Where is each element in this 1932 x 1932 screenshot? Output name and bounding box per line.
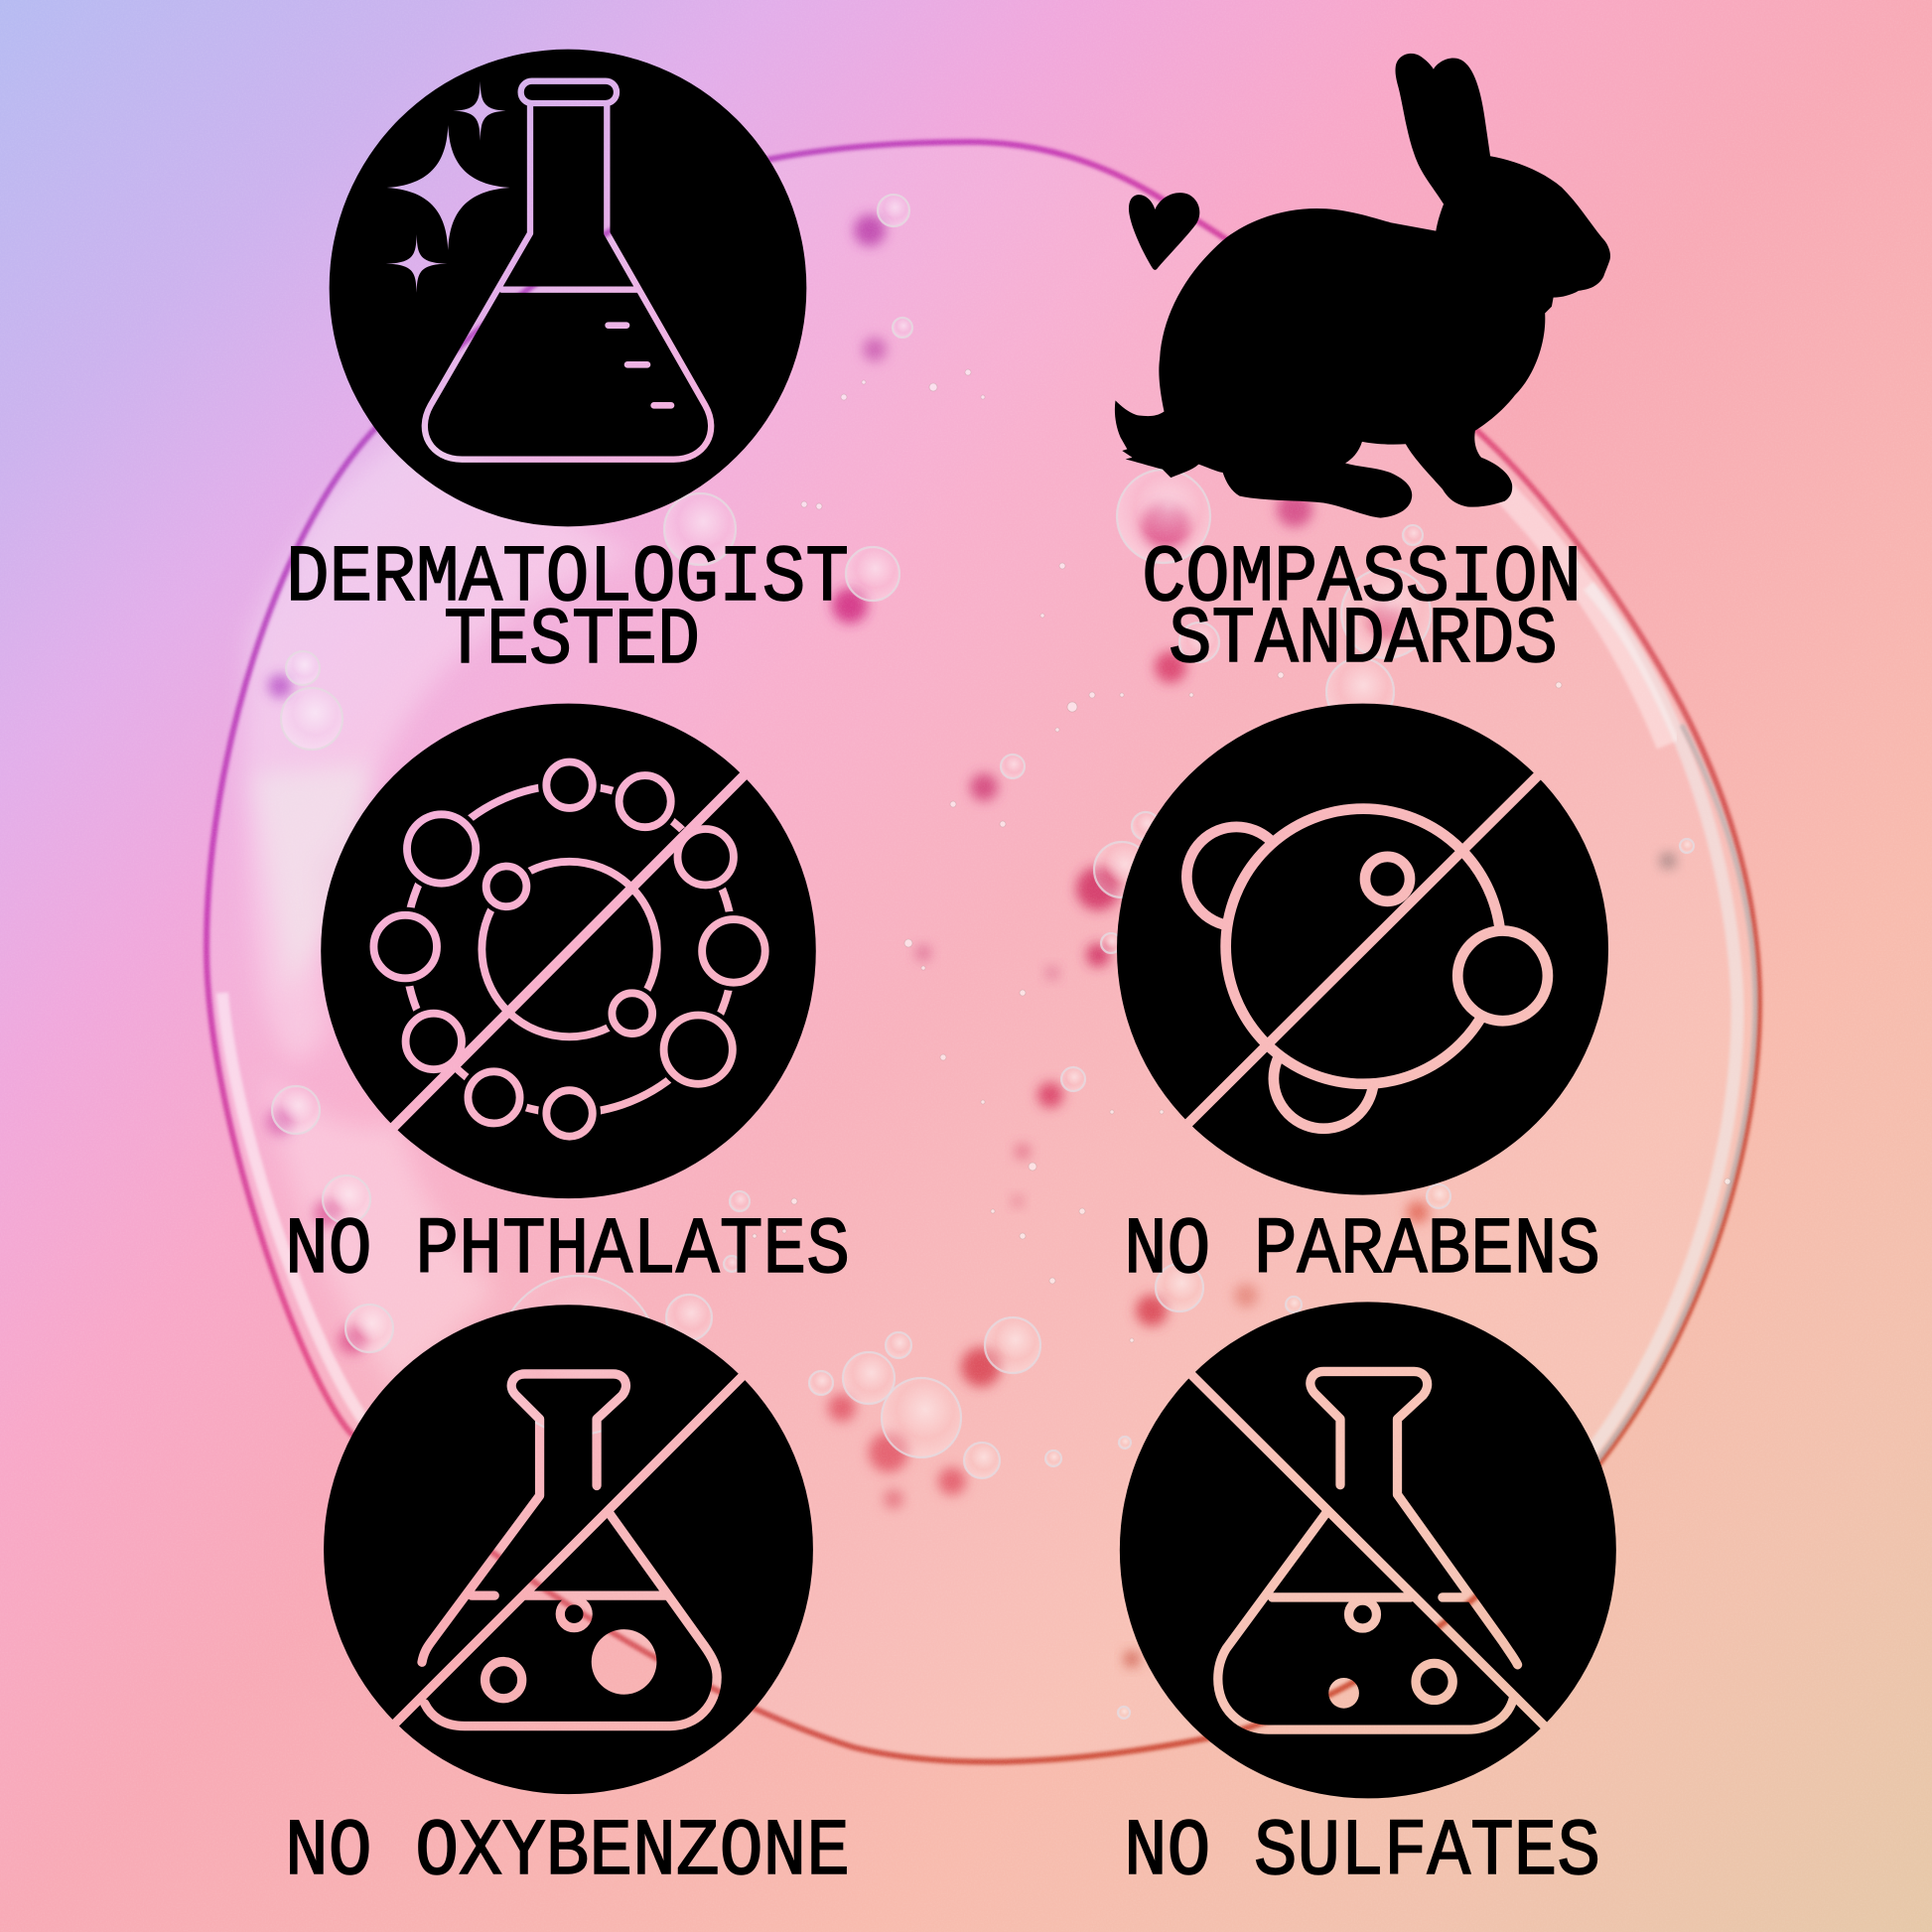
gel blob	[207, 142, 1759, 1762]
label: compassion standards: COMPASSION	[1142, 534, 1582, 624]
icon: dermatologist tested flask	[320, 40, 816, 536]
bubbles and droplets	[266, 195, 1730, 1759]
label: compassion standards	[1142, 534, 1582, 686]
icon: no sulfates	[1120, 1302, 1616, 1799]
icon: no phthalates	[321, 703, 816, 1199]
icon: no parabens	[1117, 703, 1608, 1195]
label: compassion standards: STANDARDS	[1169, 596, 1558, 686]
label: no phthalates: NO PHTHALATES	[285, 1206, 850, 1297]
icon: rabbit with heart	[1115, 54, 1610, 518]
label: dermatologist tested	[286, 534, 849, 687]
icon: no oxybenzone	[324, 1305, 813, 1795]
label: dermatologist tested: DERMATOLOGIST	[286, 534, 849, 624]
label: no sulfates: NO SULFATES	[1124, 1808, 1600, 1898]
label: no oxybenzone: NO OXYBENZONE	[285, 1808, 850, 1898]
label: dermatologist tested: TESTED	[444, 597, 700, 687]
label: no parabens: NO PARABENS	[1124, 1206, 1600, 1297]
